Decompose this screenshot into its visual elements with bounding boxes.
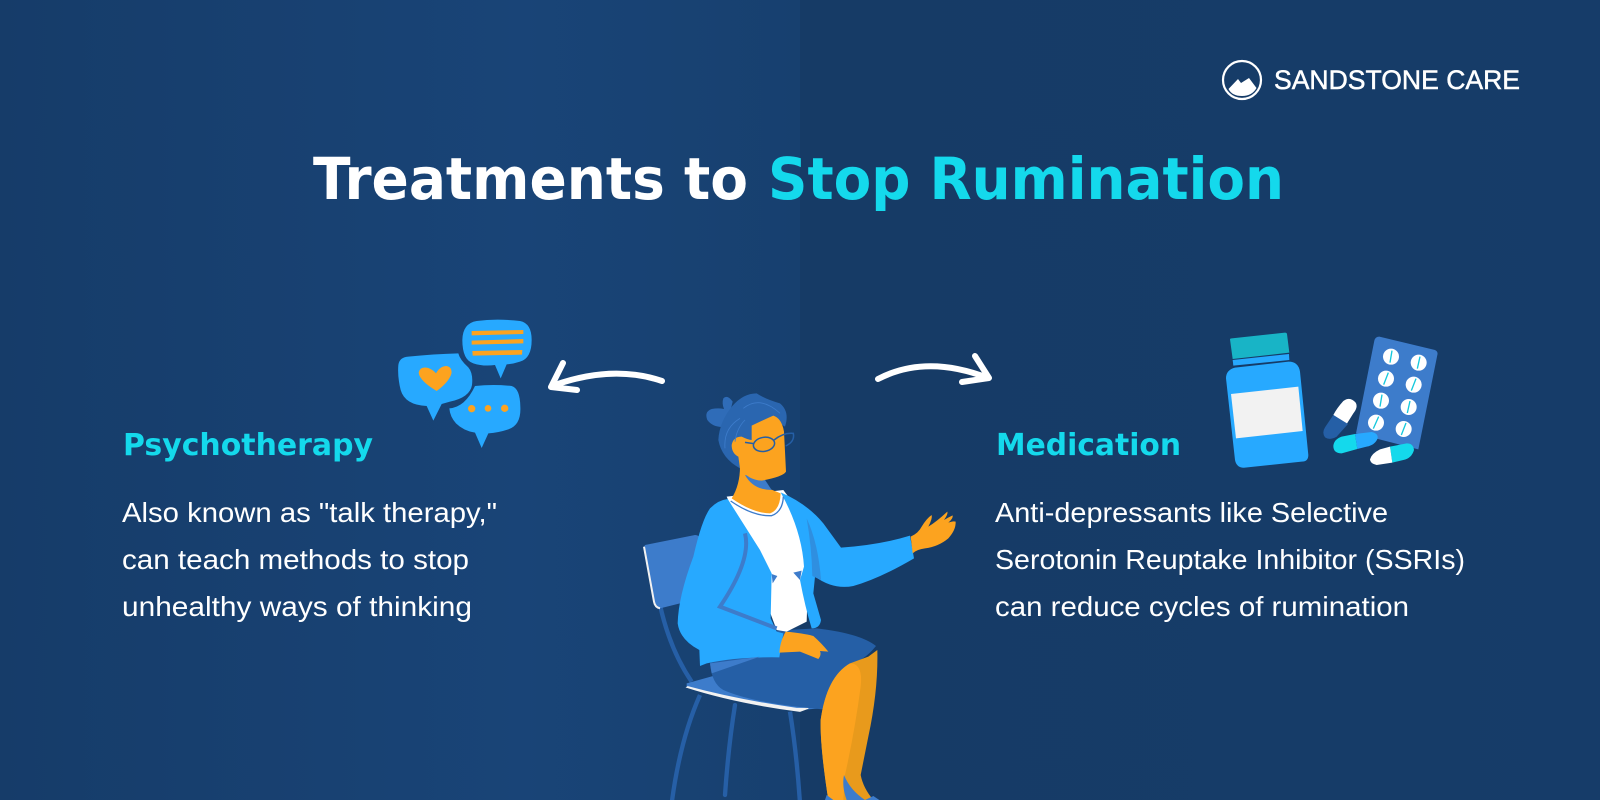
heading: medication: Medication — [996, 428, 1181, 463]
collar trim — [731, 497, 783, 516]
heading: psychotherapy: Psychotherapy — [123, 428, 373, 463]
text block: psychotherapy description: unhealthy ways of thinking — [122, 591, 472, 622]
bubble: dots — [449, 385, 520, 448]
icon: medication — [1226, 333, 1438, 468]
neck — [732, 467, 781, 513]
bubble: lines — [462, 320, 532, 378]
icon: speech bubbles — [398, 320, 532, 448]
blue cardigan — [678, 499, 783, 666]
capsule: cyan and blue — [1333, 432, 1378, 453]
head — [706, 393, 794, 516]
logo: Sandstone Care — [1223, 61, 1520, 99]
cardigan shading — [720, 533, 777, 628]
text block: psychotherapy description: Also known as "talk therapy," — [122, 497, 497, 528]
hair strands — [725, 403, 780, 448]
arrow: to psychotherapy — [551, 363, 662, 390]
hair — [718, 393, 787, 468]
bubble: heart — [398, 353, 472, 421]
text block: medication description: can reduce cycles of rumination — [995, 591, 1409, 622]
icon: mountain in circle — [1223, 61, 1261, 99]
arrow: to medication — [878, 356, 989, 382]
glasses — [745, 433, 794, 453]
panel: psychotherapy — [122, 428, 505, 622]
brand name: SANDSTONE CARE — [1274, 65, 1520, 95]
hair bun — [706, 397, 733, 427]
capsule: white and blue — [1323, 399, 1357, 439]
illustration: seated woman — [644, 393, 956, 800]
pill bottle — [1226, 333, 1308, 468]
title — [313, 145, 1284, 213]
raised hand — [911, 512, 956, 553]
panel: medication — [995, 428, 1473, 622]
capsule: white and cyan — [1370, 443, 1414, 465]
white blouse — [727, 490, 808, 632]
text block: psychotherapy description: can teach methods to stop — [122, 544, 469, 575]
text block: medication description: Serotonin Reuptake Inhibitor (SSRIs) — [995, 544, 1465, 575]
title: Treatments to — [313, 145, 748, 213]
face — [732, 416, 786, 481]
skirt — [710, 628, 876, 709]
hand on lap — [779, 632, 828, 659]
blister pack — [1356, 337, 1438, 449]
legs — [821, 650, 879, 800]
title: Stop Rumination — [768, 145, 1284, 213]
text block: medication description: Anti-depressants like Selective — [995, 497, 1388, 528]
chair — [644, 535, 820, 800]
